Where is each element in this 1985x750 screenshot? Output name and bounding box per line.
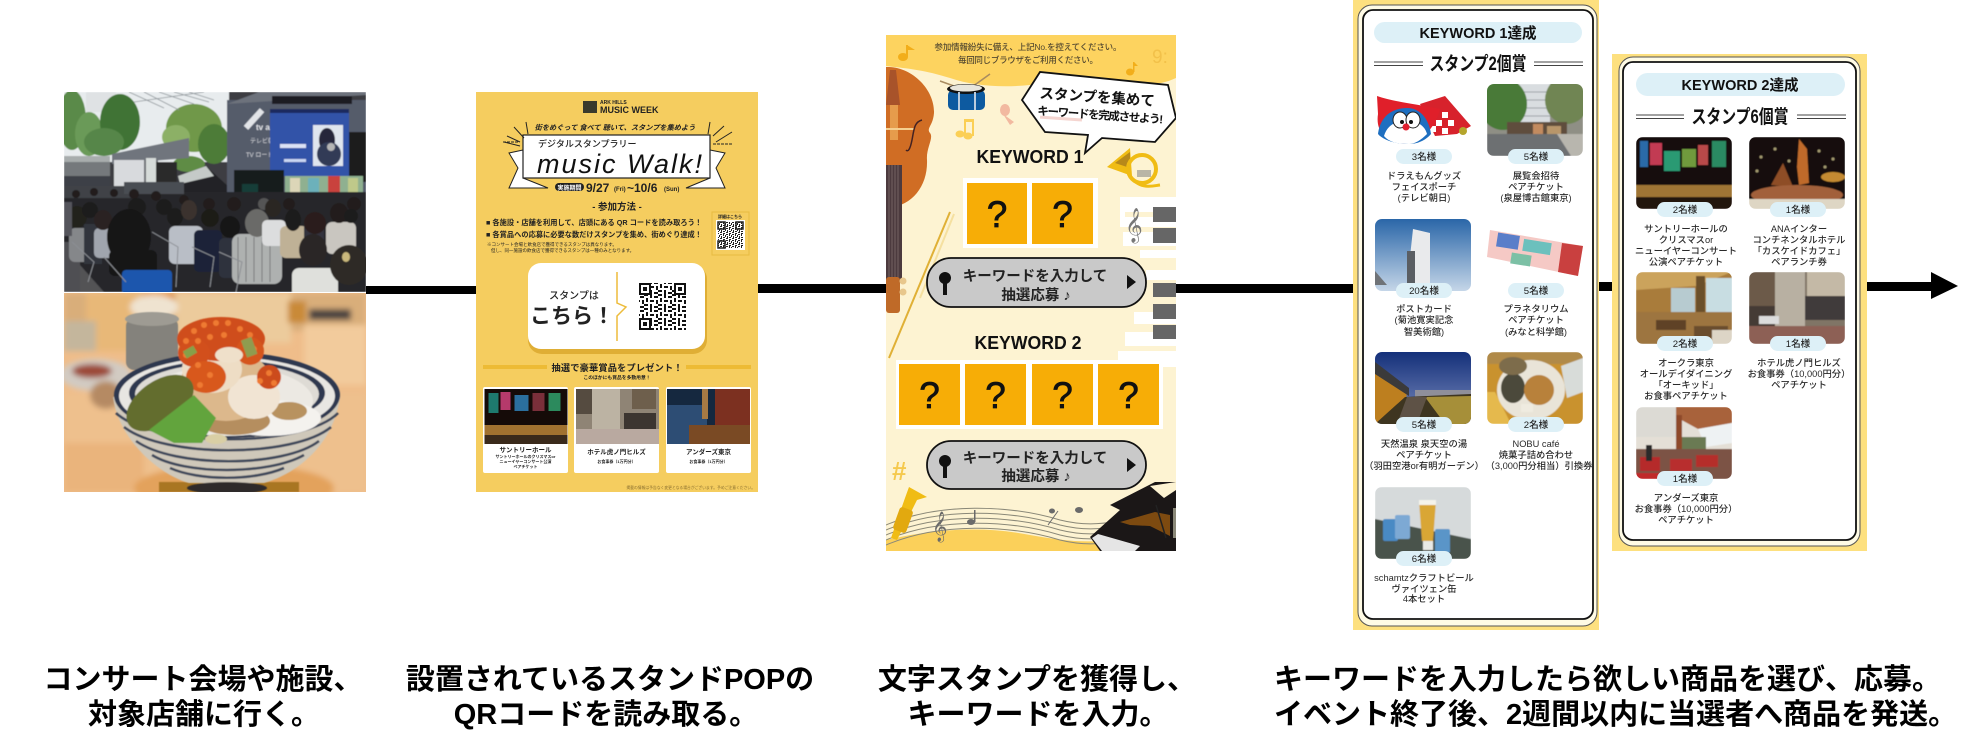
- poster prize card: Andaz Tokyo: [666, 387, 751, 473]
- prize: Doraemon pouch: ドラえもんグッズ: [1387, 170, 1461, 181]
- prize: Okura Tokyo Orchid: お食事ペアチケット: [1644, 390, 1728, 401]
- poster how-to section: 但し、同一施設の飲食店で獲得できるスタンプは一種のみとなります。: [491, 247, 634, 254]
- poster prize card: Suntory Hall: [483, 387, 568, 473]
- panel: keyword 2 prizes: [1612, 54, 1867, 551]
- keyword 1 heading: KEYWORD 1: [976, 147, 1084, 167]
- prize: planetarium tickets: プラネタリウム: [1503, 303, 1569, 314]
- prize: craft beer: 4本セット: [1403, 593, 1445, 604]
- poster prize card: Andaz Tokyo: お食事券（1万円分）: [689, 458, 728, 464]
- icon: drum: [940, 74, 990, 110]
- caption: step 3: キーワードを入力。: [907, 698, 1169, 731]
- bottom wave with staff: 𝄞: [932, 511, 947, 543]
- poster title banner: [503, 122, 733, 188]
- prize: Doraemon pouch: [1377, 96, 1471, 203]
- prize: ANA InterContinental lunch: 「カスケイドカフェ」: [1753, 246, 1845, 256]
- speech bubble: スタンプを集めて: [1039, 84, 1155, 110]
- poster stamp card: こちら！: [530, 305, 614, 328]
- panel: stamp collection screen: [886, 35, 1176, 551]
- prize: ANA InterContinental lunch: コンチネンタルホテル: [1753, 234, 1845, 245]
- prize: planetarium tickets: (みなと科学館): [1505, 326, 1567, 337]
- panel: stand POP poster: [476, 92, 758, 492]
- poster event dates: [555, 181, 679, 195]
- speech bubble: [1022, 72, 1176, 153]
- prize: Hotel Toranomon Hills voucher: 1名様: [1786, 338, 1811, 350]
- poster small QR: 詳細はこちら: [718, 213, 742, 219]
- icon: violin bow: [889, 212, 950, 358]
- prize: Hotel Toranomon Hills voucher: お食事券（10,000円分）: [1748, 368, 1850, 379]
- instruction note: 毎回同じブラウザをご利用ください。: [958, 55, 1098, 65]
- prize: onsen tickets: （羽田空港or有明ガーデン）: [1364, 460, 1484, 471]
- keyword 1 achieved pill: KEYWORD 1達成: [1420, 24, 1536, 42]
- prize: Suntory Hall concert: [1635, 137, 1737, 267]
- poster event dates: ~10/6: [627, 181, 658, 195]
- icon: trumpet: [891, 487, 927, 540]
- caption: step 3: [878, 663, 1196, 731]
- keyword 1 button: 抽選応募 ♪: [1001, 286, 1071, 304]
- poster prizes heading: このほかにも賞品を多数用意！: [583, 374, 651, 381]
- keyword 2 button: 抽選応募 ♪: [1001, 467, 1071, 485]
- caption: step 2: [406, 663, 814, 731]
- photo: concert audience at venue: TV ロード: [246, 153, 273, 159]
- prize: NOBU cafe sweets: NOBU café: [1512, 439, 1560, 449]
- poster logo: [583, 100, 659, 115]
- prize: Hotel Toranomon Hills voucher: ホテル虎ノ門ヒルズ: [1757, 357, 1841, 368]
- icon: grand piano: [1090, 482, 1176, 551]
- poster how-to section: ■ 各賞品への応募に必要な数だけスタンプを集め、街めぐり達成！: [486, 230, 702, 239]
- prize: Kikuchi museum postcard: 20名様: [1409, 285, 1439, 297]
- poster title banner: music Walk!: [537, 149, 702, 179]
- prize: Suntory Hall concert: 公演ペアチケット: [1649, 256, 1723, 267]
- bottom wave with staff: [886, 507, 1106, 551]
- prize: Andaz Tokyo voucher: お食事券（10,000円分）: [1635, 503, 1737, 514]
- keyword 2 achieved pill: [1636, 73, 1845, 96]
- keyword 1 stamp boxes: ?: [1052, 194, 1073, 235]
- prize: Suntory Hall concert: 2名様: [1673, 204, 1698, 216]
- poster logo: ARK HILLS: [600, 100, 627, 106]
- prize: Okura Tokyo Orchid: オールデイダイニング: [1640, 368, 1732, 379]
- prize: ANA InterContinental lunch: [1749, 137, 1845, 267]
- poster how-to section: - 参加方法 -: [592, 201, 642, 213]
- prize: Andaz Tokyo voucher: 1名様: [1673, 473, 1698, 485]
- poster how-to section: ■ 各施設・店舗を利用して、店頭にある QR コードを読み取ろう！: [486, 218, 702, 227]
- poster prize card: Hotel Toranomon Hills: ホテル虎ノ門ヒルズ: [587, 447, 646, 456]
- prize: Kikuchi museum postcard: [1375, 219, 1471, 337]
- caption: step 2: QRコードを読み取る。: [454, 698, 758, 731]
- prize: NOBU cafe sweets: 2名様: [1524, 419, 1549, 431]
- poster prize card: Suntory Hall: ニューイヤーコンサート公演: [500, 458, 551, 464]
- music notes decoration: [898, 45, 1168, 140]
- prize: onsen tickets: [1370, 352, 1478, 470]
- stamp 6 prize heading: スタンプ6個賞: [1692, 106, 1788, 128]
- poster prize card: Suntory Hall: サントリーホール: [500, 446, 552, 454]
- poster prizes heading: [483, 362, 751, 381]
- prize: Doraemon pouch: フェイスポーチ: [1392, 182, 1456, 192]
- panel: keyword 1 prizes: [1353, 0, 1599, 630]
- prize: Sen-Oku museum tickets: 5名様: [1524, 151, 1549, 163]
- photo: concert audience at venue: テレビ朝日: [250, 137, 280, 145]
- photo: seafood rice bowl at restaurant: [64, 293, 366, 492]
- caption: step 1: [43, 663, 363, 731]
- prize: planetarium tickets: [1487, 230, 1583, 337]
- prize: Andaz Tokyo voucher: [1635, 407, 1737, 525]
- prize: craft beer: ヴァイツェン缶: [1391, 583, 1457, 594]
- prize: onsen tickets: 天然温泉 泉天空の湯: [1381, 438, 1467, 449]
- poster prizes heading: 抽選で豪華賞品をプレゼント！: [552, 362, 682, 373]
- poster event dates: 実施期間: [557, 184, 582, 192]
- keyword 1 achieved pill: [1374, 22, 1582, 43]
- keyword 2 stamp boxes: ?: [919, 375, 940, 416]
- prize: Kikuchi museum postcard: ポストカード: [1396, 304, 1452, 314]
- keyword 1 button: [927, 258, 1146, 307]
- poster tagline: 街をめぐって 食べて 聴いて、スタンプを集めよう: [535, 123, 695, 132]
- prize: Suntory Hall concert: ニューイヤーコンサート: [1635, 246, 1737, 256]
- keyword 2 button: [927, 441, 1146, 489]
- poster prize card: Andaz Tokyo: アンダーズ東京: [686, 447, 731, 456]
- prize: Sen-Oku museum tickets: 展覧会招待: [1513, 170, 1559, 181]
- caption: step 4: イベント終了後、2週間以内に当選者へ商品を発送。: [1274, 698, 1957, 731]
- prize: ANA InterContinental lunch: ペアランチ券: [1771, 256, 1827, 267]
- caption: step 1: コンサート会場や施設、: [43, 663, 363, 696]
- poster how-to section: [486, 201, 702, 254]
- instruction note: 参加情報紛失に備え、上記No.を控えてください。: [934, 42, 1122, 52]
- prize: Hotel Toranomon Hills voucher: [1748, 272, 1850, 390]
- top yellow wave: [886, 35, 1176, 86]
- treble clef: 𝄞: [1125, 208, 1143, 244]
- poster small QR: [712, 212, 749, 255]
- prize: NOBU cafe sweets: 焼菓子詰め合わせ: [1499, 449, 1573, 460]
- keyword 2 stamp boxes: ?: [1118, 375, 1139, 416]
- keyword 2 stamp boxes: ?: [985, 375, 1006, 416]
- keyword 2 stamp boxes: ?: [1052, 375, 1073, 416]
- poster prize card: Hotel Toranomon Hills: [574, 387, 659, 473]
- prize: Kikuchi museum postcard: (菊池寛実記念: [1395, 314, 1453, 325]
- keyword 2 stamp boxes: [896, 360, 1163, 429]
- prize: Hotel Toranomon Hills voucher: ペアチケット: [1771, 380, 1827, 390]
- icon: violin: [886, 67, 934, 313]
- poster event dates: (Sun): [664, 187, 679, 193]
- prize: Andaz Tokyo voucher: アンダーズ東京: [1654, 492, 1718, 503]
- caption: step 4: [1274, 663, 1957, 731]
- stamp 2 prize heading: スタンプ2個賞: [1430, 53, 1526, 75]
- poster title banner: デジタルスタンプラリー: [538, 138, 637, 149]
- prize: Kikuchi museum postcard: 智美術館): [1404, 326, 1444, 337]
- poster prize card: Suntory Hall: サントリーホールのクリスマスor: [496, 453, 556, 459]
- poster stamp card: スタンプは: [549, 290, 599, 302]
- keyword 1 stamp boxes: ?: [987, 194, 1007, 235]
- caption: step 1: 対象店舗に行く。: [88, 698, 320, 731]
- prize: NOBU cafe sweets: [1486, 352, 1592, 471]
- prize: onsen tickets: 5名様: [1412, 419, 1437, 431]
- prize: Sen-Oku museum tickets: ペアチケット: [1508, 182, 1564, 192]
- speech bubble: キーワードを完成させよう!: [1037, 104, 1164, 126]
- poster how-to section: ※コンサート会場と飲食店で獲得できるスタンプは異なります。: [487, 241, 617, 248]
- instruction note: [934, 42, 1122, 65]
- prize: Andaz Tokyo voucher: ペアチケット: [1658, 515, 1714, 525]
- prize: Okura Tokyo Orchid: [1636, 272, 1732, 401]
- prize: planetarium tickets: 5名様: [1524, 285, 1549, 297]
- poster prize card: Suntory Hall: ペアチケット: [514, 463, 537, 469]
- prize: craft beer: schamtzクラフトビール: [1374, 572, 1474, 583]
- caption: step 2: 設置されているスタンドPOPの: [406, 663, 814, 696]
- sharp sign: #: [892, 456, 907, 486]
- prize: craft beer: [1374, 487, 1474, 604]
- poster event dates: (Fri): [614, 187, 626, 193]
- prize: Sen-Oku museum tickets: [1487, 84, 1583, 203]
- caption: step 3: 文字スタンプを獲得し、: [878, 663, 1196, 696]
- prize: NOBU cafe sweets: （3,000円分相当）引換券: [1486, 460, 1592, 471]
- poster disclaimer: 掲載の情報は予告なく変更となる場合がございます。予めご注意ください。: [626, 485, 755, 490]
- prize: Doraemon pouch: 3名様: [1412, 151, 1437, 163]
- arrow: process flow line: [366, 272, 1958, 299]
- keyword 2 button: キーワードを入力して: [963, 450, 1107, 467]
- photo: concert audience at venue: tv asahi: [256, 123, 286, 132]
- photo: concert audience at venue: [58, 90, 368, 298]
- prize: planetarium tickets: ペアチケット: [1508, 315, 1564, 325]
- prize: Suntory Hall concert: クリスマスor: [1659, 235, 1713, 245]
- prize: Okura Tokyo Orchid: 2名様: [1673, 338, 1698, 350]
- piano keys decoration: [1118, 197, 1176, 367]
- prize: Doraemon pouch: (テレビ朝日): [1398, 192, 1450, 203]
- prize: Suntory Hall concert: サントリーホールの: [1644, 224, 1728, 234]
- prize: ANA InterContinental lunch: 1名様: [1786, 204, 1811, 216]
- music notes decoration: 9:: [1152, 47, 1168, 68]
- keyword 1 stamp boxes: [963, 178, 1098, 248]
- keyword 1 button: キーワードを入力して: [963, 268, 1107, 285]
- prize: ANA InterContinental lunch: ANAインター: [1771, 223, 1827, 234]
- prize: Okura Tokyo Orchid: 「オーキッド」: [1653, 380, 1719, 390]
- prize: onsen tickets: ペアチケット: [1396, 450, 1452, 460]
- poster prize card: Hotel Toranomon Hills: お食事券（1万円分）: [597, 458, 636, 464]
- prize: Sen-Oku museum tickets: (泉屋博古館東京): [1500, 192, 1572, 203]
- keyword 2 achieved pill: KEYWORD 2達成: [1682, 76, 1798, 94]
- poster event dates: 9/27: [586, 181, 610, 195]
- poster stamp card: [528, 263, 707, 354]
- prize: Okura Tokyo Orchid: オークラ東京: [1658, 357, 1714, 368]
- icon: french horn: [1107, 148, 1160, 186]
- caption: step 4: キーワードを入力したら欲しい商品を選び、応募。: [1274, 663, 1941, 696]
- poster logo: MUSIC WEEK: [600, 105, 659, 115]
- prize: craft beer: 6名様: [1412, 553, 1437, 565]
- keyword 2 heading: KEYWORD 2: [974, 333, 1082, 353]
